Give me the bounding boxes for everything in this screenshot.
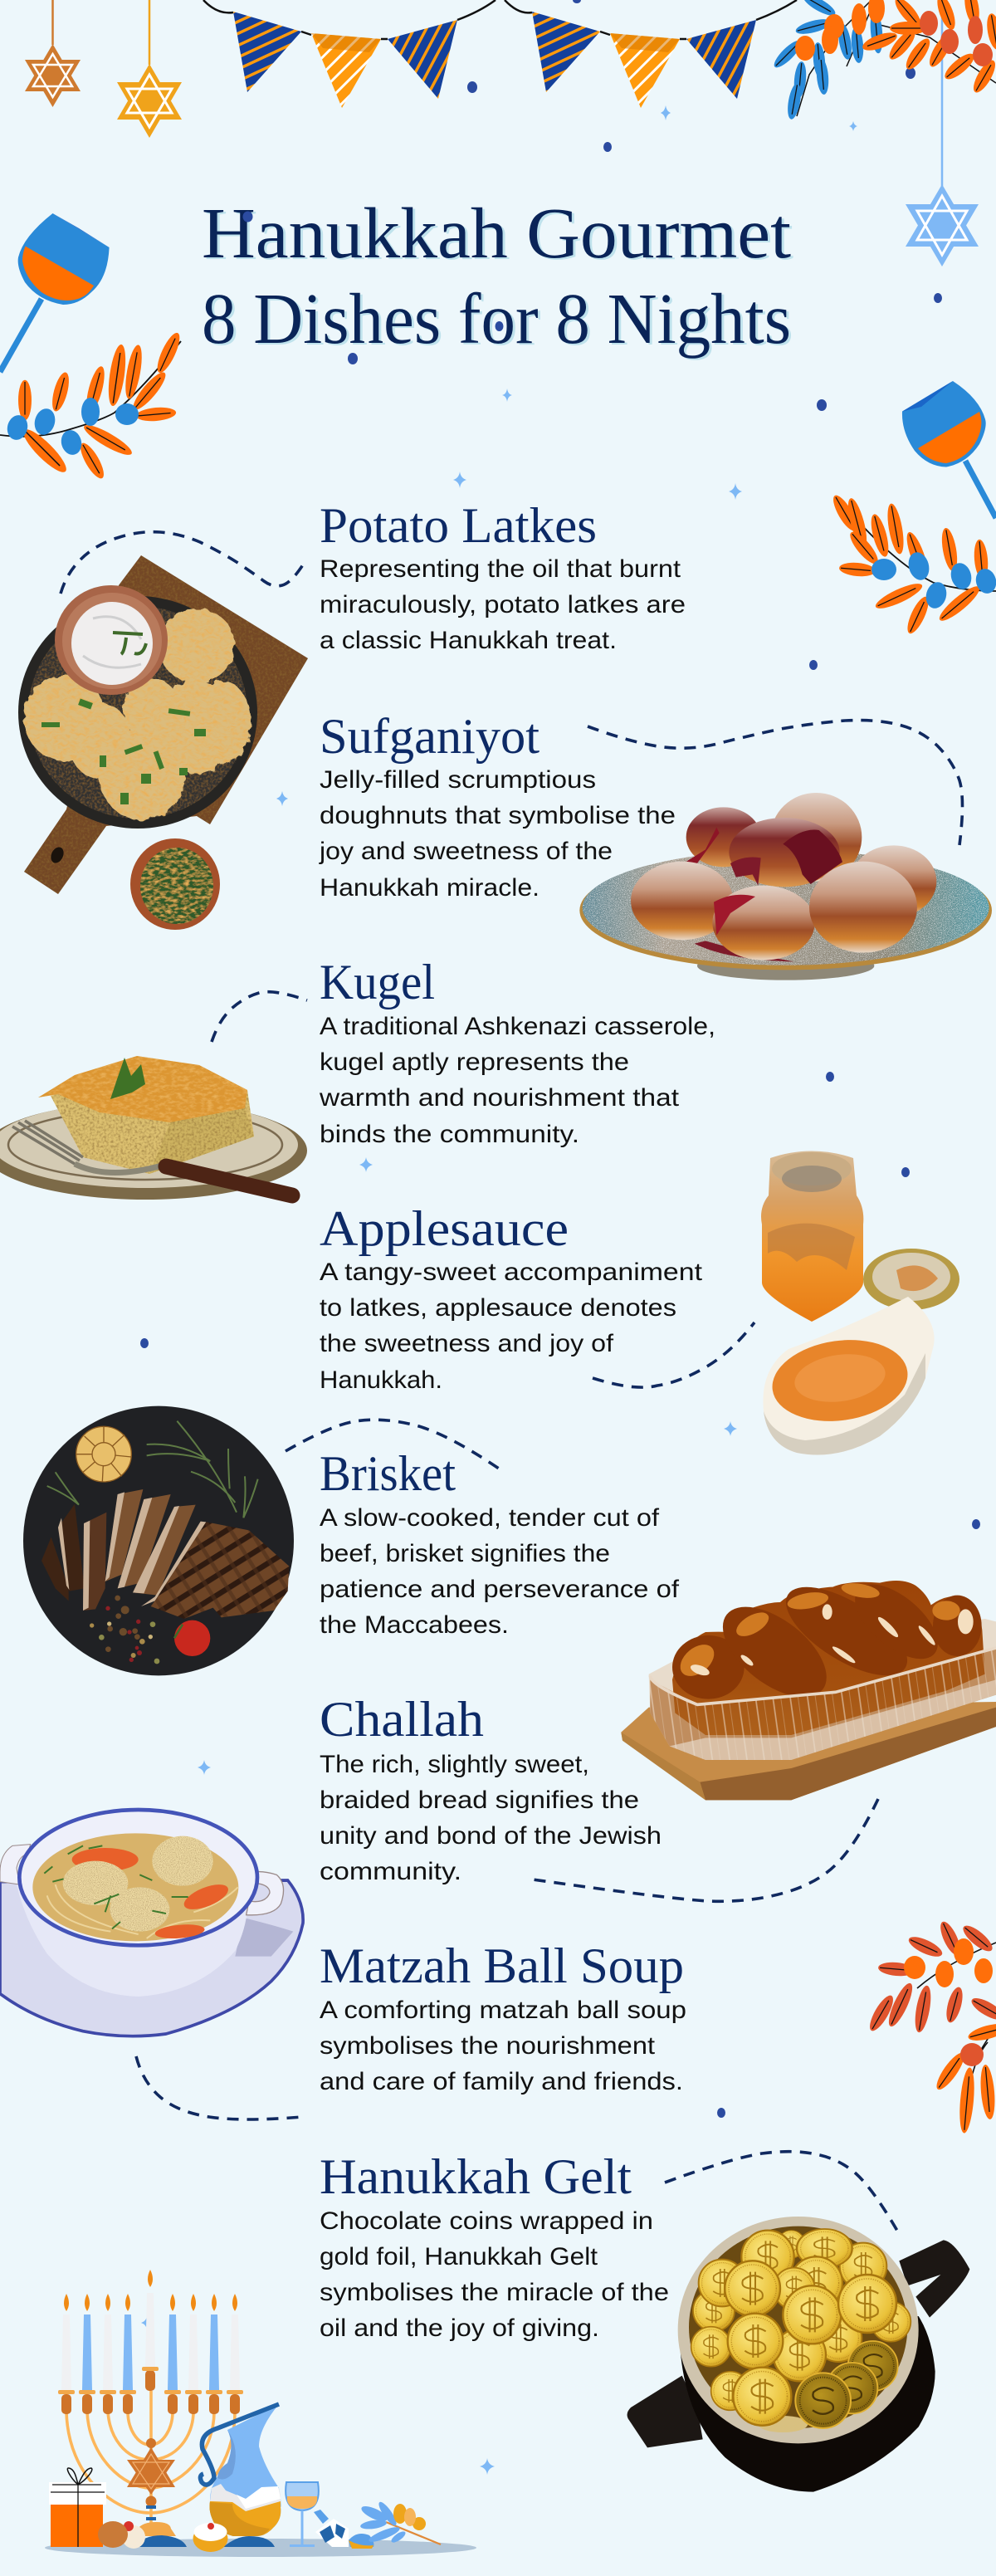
bottom right foliage — [866, 1919, 996, 2134]
heading: Applesauce — [320, 1201, 569, 1256]
left olive branch — [0, 330, 183, 481]
gift box — [49, 2468, 106, 2547]
right olive branch — [829, 492, 996, 636]
dashed connector — [665, 2152, 897, 2231]
photo: sufganiyot on a plate — [579, 793, 992, 980]
top right foliage — [770, 0, 996, 120]
description: community. — [320, 1858, 461, 1885]
description: binds the community. — [320, 1121, 579, 1148]
panel: applesauce — [320, 1151, 959, 1454]
panel: sufganiyot — [319, 709, 992, 980]
description: Hanukkah. — [320, 1366, 442, 1394]
description: warmth and nourishment that — [319, 1084, 679, 1112]
dreidel — [314, 2510, 374, 2549]
dashed connector — [286, 1420, 499, 1469]
description — [319, 766, 676, 902]
description — [320, 1504, 680, 1639]
description — [320, 555, 686, 654]
photo: sliced brisket on slate — [23, 1406, 294, 1675]
description: Jelly-filled scrumptious — [320, 766, 596, 794]
table shadow — [45, 2539, 476, 2557]
small wine glass — [286, 2482, 319, 2547]
description: A traditional Ashkenazi casserole, — [320, 1013, 715, 1040]
pastries — [98, 2521, 227, 2552]
heading: Brisket — [320, 1446, 456, 1501]
panel: matzah ball soup — [0, 1810, 686, 2119]
star of david on menorah — [127, 2438, 175, 2520]
description: gold foil, Hanukkah Gelt — [320, 2243, 598, 2270]
photo: pot of gold coins — [627, 2217, 969, 2492]
description: A comforting matzah ball soup — [320, 1997, 686, 2024]
illustration: menorah, jug, gift and dreidel — [45, 2270, 476, 2557]
heading: Challah — [320, 1692, 484, 1747]
description — [319, 1013, 715, 1148]
description — [320, 1751, 662, 1885]
photo: matzah ball soup bowl on a saucer — [0, 1810, 303, 2036]
dashed connector — [588, 721, 963, 845]
description: kugel aptly represents the — [320, 1048, 629, 1076]
panel: challah — [320, 1570, 996, 1901]
photo: potato latkes on a board — [18, 555, 308, 930]
photo: challah in a glass dish — [621, 1570, 996, 1800]
title: Hanukkah Gourmet — [202, 193, 791, 273]
panel: hanukkah gelt — [320, 2149, 969, 2492]
description: to latkes, applesauce denotes — [320, 1294, 676, 1322]
candle holders — [58, 2367, 243, 2414]
icon: hanging star, copper — [25, 0, 81, 107]
title — [202, 193, 791, 359]
dashed connector — [212, 992, 307, 1042]
description: braided bread signifies the — [320, 1787, 639, 1814]
description: Chocolate coins wrapped in — [320, 2207, 653, 2235]
dots over the title — [242, 211, 503, 331]
description: a classic Hanukkah treat. — [320, 627, 617, 654]
icon: hanging star, light blue — [906, 0, 979, 266]
panel: potato latkes — [18, 498, 686, 930]
heading: Hanukkah Gelt — [320, 2149, 632, 2204]
photo: applesauce jar, lid and dish — [761, 1151, 959, 1454]
description: doughnuts that symbolise the — [320, 802, 676, 829]
description: and care of family and friends. — [320, 2068, 683, 2095]
description: Representing the oil that burnt — [320, 555, 681, 583]
leaf and flower sprig — [359, 2500, 441, 2544]
description — [320, 1259, 702, 1394]
heading: Potato Latkes — [320, 498, 597, 553]
description: symbolises the miracle of the — [320, 2279, 669, 2306]
description: joy and sweetness of the — [319, 838, 613, 865]
dashed connector — [593, 1322, 754, 1387]
description: the sweetness and joy of — [320, 1330, 614, 1357]
dashed connector — [61, 532, 306, 594]
heading: Matzah Ball Soup — [320, 1938, 684, 1993]
icon: wine glass left — [0, 213, 110, 372]
heading: Sufganiyot — [320, 709, 540, 764]
description: Hanukkah miracle. — [320, 874, 540, 902]
description: symbolises the nourishment — [320, 2032, 655, 2060]
jug — [200, 2404, 281, 2547]
description: patience and perseverance of — [320, 1576, 680, 1603]
description — [320, 1997, 686, 2095]
photo: kugel with fork — [0, 1056, 307, 1200]
description: The rich, slightly sweet, — [320, 1751, 589, 1778]
description: oil and the joy of giving. — [320, 2314, 599, 2342]
description: A tangy-sweet accompaniment — [320, 1259, 702, 1286]
menorah arms — [66, 2391, 235, 2528]
description: the Maccabees. — [320, 1611, 509, 1639]
candles — [61, 2270, 240, 2390]
icon: wine glass right — [902, 381, 996, 518]
description: A slow-cooked, tender cut of — [320, 1504, 660, 1532]
icon: hanging star, gold — [117, 0, 182, 138]
dashed connector — [136, 2056, 302, 2119]
heading: Kugel — [320, 955, 435, 1009]
menorah base — [134, 2522, 187, 2547]
panel: kugel — [0, 955, 715, 1200]
bunting garland — [203, 0, 797, 108]
description: beef, brisket signifies the — [320, 1540, 610, 1567]
panel: brisket — [23, 1406, 680, 1675]
dashed connector — [527, 1799, 878, 1901]
description — [320, 2207, 669, 2342]
description: unity and bond of the Jewish — [320, 1822, 662, 1850]
title: 8 Dishes for 8 Nights — [202, 278, 791, 359]
description: miraculously, potato latkes are — [320, 591, 686, 618]
